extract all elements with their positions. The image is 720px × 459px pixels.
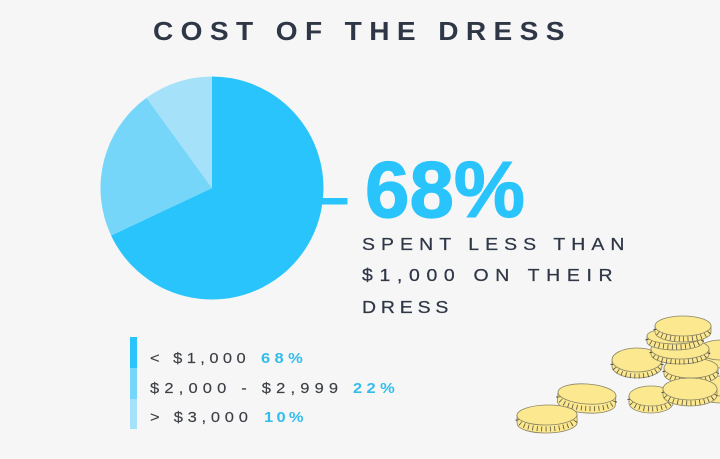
coin: [612, 348, 662, 378]
slice: over $3,000, 10%: [146, 76, 212, 188]
description text: DRESS: [362, 297, 448, 317]
slice: $2,000 to $2,999, 22%: [100, 98, 212, 236]
coin: [647, 328, 703, 350]
legend row 3: > $3,000: [150, 410, 248, 426]
description text: [362, 234, 624, 317]
legend row 1: [150, 351, 303, 367]
coin: [629, 386, 673, 413]
legend row 2: $2,000 - $2,999: [150, 381, 338, 397]
top coin: [655, 316, 711, 342]
right edge coin lower: [698, 376, 720, 403]
title: COST OF THE DRESS: [153, 17, 564, 46]
coin: [664, 358, 718, 384]
legend: [130, 337, 395, 429]
connector line: [320, 198, 348, 204]
legend row 1: < $1,000: [150, 351, 246, 367]
legend row 3: [150, 410, 304, 426]
description text: SPENT LESS THAN: [362, 234, 624, 254]
bottom left coin: [517, 404, 577, 434]
big percentage: 68%: [365, 145, 525, 234]
slice: under $1,000, 68%: [111, 76, 323, 299]
coin: [651, 339, 709, 364]
right edge coin upper: [698, 340, 720, 368]
legend row 3: 10%: [264, 410, 304, 426]
legend row 2: 22%: [353, 381, 395, 397]
legend colour bar: [130, 337, 137, 429]
legend row 1: 68%: [261, 351, 303, 367]
coin: [557, 382, 617, 415]
description text: $1,000 ON THEIR: [362, 265, 613, 285]
pie chart: [100, 76, 323, 299]
coin: [663, 378, 717, 406]
illustration: gold coins: [517, 316, 720, 434]
